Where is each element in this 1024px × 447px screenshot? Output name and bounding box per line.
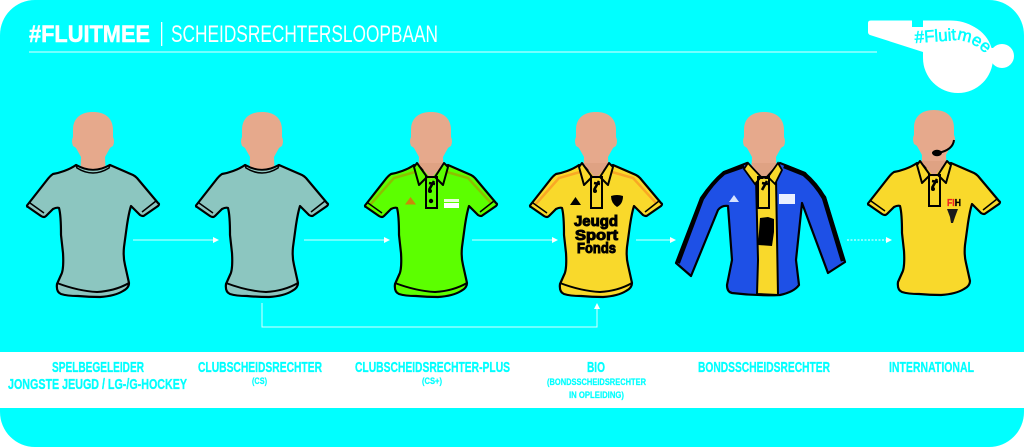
title — [29, 21, 438, 48]
label: clubscheidsrechter: CLUBSCHEIDSRECHTER — [198, 360, 322, 376]
label: bio: BIO — [587, 360, 605, 376]
figure: spelbegeleider, grey t-shirt — [27, 112, 159, 297]
figure: clubscheidsrechter-plus, green polo — [365, 112, 497, 297]
figure: bio, yellow polo with sponsor: Jeugd — [574, 213, 618, 230]
arrow: spelbegeleider to clubscheidsrechter — [133, 237, 219, 243]
label: spelbegeleider: SPELBEGELEIDER — [52, 360, 144, 376]
label: bio: IN OPLEIDING) — [569, 390, 624, 401]
figure: bio, yellow polo with sponsor: Fonds — [577, 240, 616, 257]
label: bondsscheidsrechter: BONDSSCHEIDSRECHTER — [698, 360, 830, 376]
label: clubscheidsrechter-plus: CLUBSCHEIDSRECHTER-PLUS — [355, 360, 510, 376]
arrow: elbow from clubscheidsrechter to bio — [262, 303, 600, 327]
figure: bondsscheidsrechter, blue jacket — [676, 112, 845, 295]
label: international: INTERNATIONAL — [889, 360, 974, 376]
title: #FLUITMEE — [29, 21, 150, 48]
label: spelbegeleider: JONGSTE JEUGD / LG-/G-HOCKEY — [8, 377, 187, 393]
icon: whistle logo: #Fluitmee — [914, 28, 990, 52]
figure: bio, yellow polo with sponsor: Sport — [575, 227, 618, 244]
figure: international, yellow polo with headset — [868, 110, 1000, 295]
label: clubscheidsrechter-plus — [355, 360, 510, 387]
icon: whistle logo — [868, 20, 1014, 93]
label: clubscheidsrechter: (CS) — [252, 376, 267, 387]
label: clubscheidsrechter — [198, 360, 322, 387]
label: bio: (BONDSSCHEIDSRECHTER — [547, 377, 646, 388]
figure: bio, yellow polo with sponsor — [530, 112, 662, 297]
label: spelbegeleider — [8, 360, 187, 393]
label band — [0, 352, 1024, 408]
arrow: bio to bondsscheidsrechter — [636, 237, 676, 243]
figure: clubscheidsrechter, grey t-shirt — [196, 112, 328, 297]
label: clubscheidsrechter-plus: (CS+) — [422, 376, 442, 387]
arrow: dotted, bondsscheidsrechter to international — [847, 237, 892, 243]
arrow: clubscheidsrechter to clubscheidsrechter-plus — [304, 237, 390, 243]
title: SCHEIDSRECHTERSLOOPBAAN — [171, 21, 438, 48]
arrow: clubscheidsrechter-plus to bio — [472, 237, 558, 243]
label: bio — [547, 360, 646, 401]
figure: international, yellow polo with headset: FIH — [947, 198, 961, 209]
